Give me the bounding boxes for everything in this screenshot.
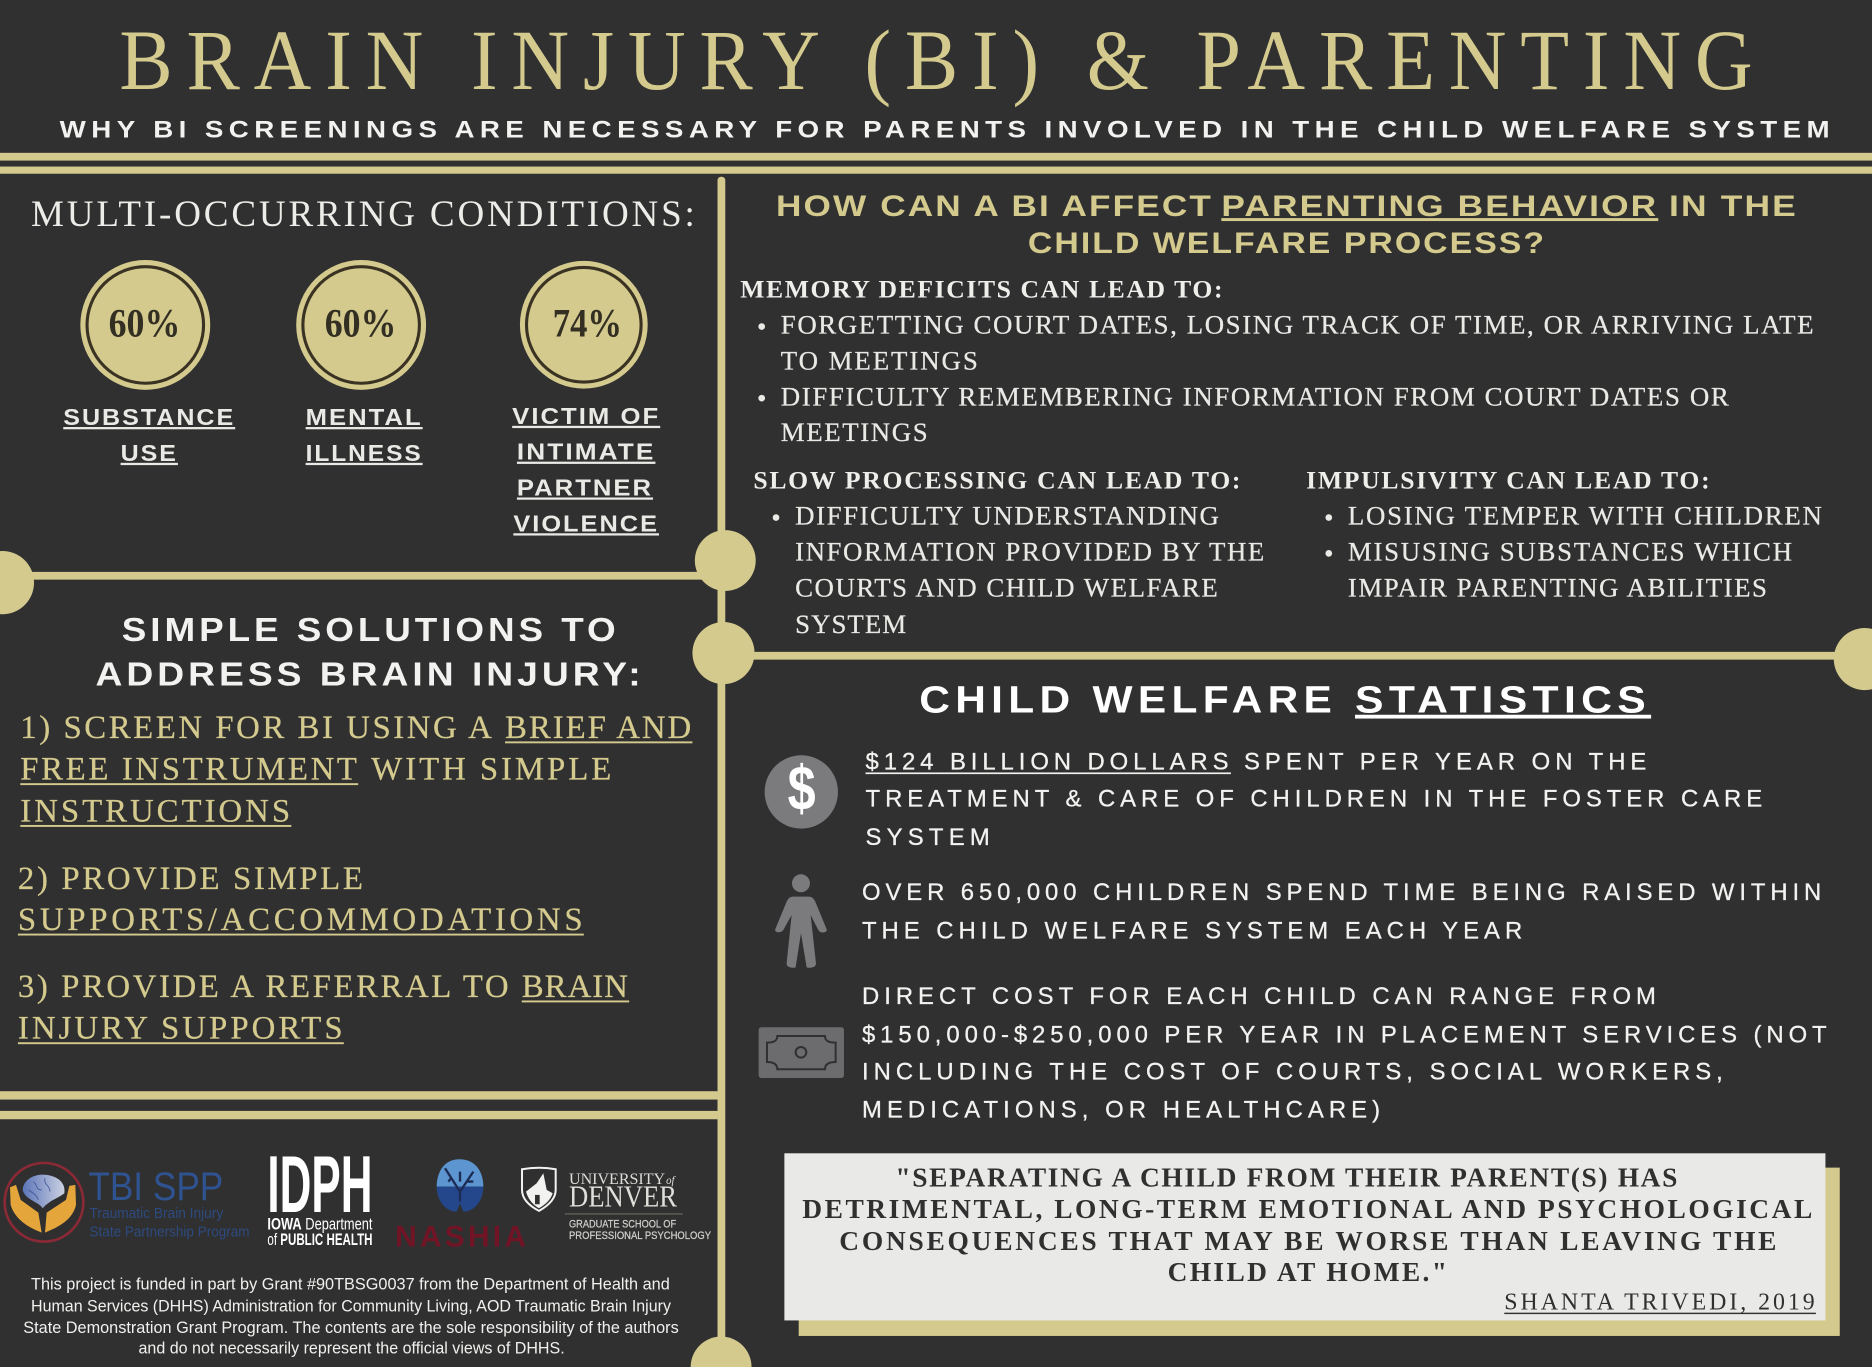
text block: memory deficits: MEMORY DEFICITS CAN LEAD TO:	[740, 274, 1223, 303]
panel: parenting behavior	[740, 190, 1822, 639]
stat: 74% victim of intimate partner violence: 74%	[553, 301, 622, 346]
logo: NASHIA	[395, 1159, 526, 1253]
stat: 74% victim of intimate partner violence: INTIMATE	[517, 439, 655, 465]
stat: direct cost: DIRECT COST FOR EACH CHILD CAN RANGE FROM	[862, 983, 1656, 1010]
panel: multi-occurring conditions	[31, 194, 695, 536]
text block: memory deficits: FORGETTING COURT DATES, LOSING TRACK OF TIME, OR ARRIVING LATE	[781, 310, 1814, 340]
stat: direct cost: MEDICATIONS, OR HEALTHCARE)	[862, 1096, 1380, 1123]
logo: University of Denver: PROFESSIONAL PSYCHOLOGY	[569, 1230, 711, 1242]
stat: 124 billion: $124 BILLION DOLLARS	[866, 748, 1228, 775]
stat: 124 billion: SPENT PER YEAR ON THE	[1244, 748, 1646, 775]
panel: logos	[5, 1140, 711, 1253]
logo: University of Denver: UNIVERSITY	[569, 1171, 665, 1188]
solution 3	[18, 969, 629, 1047]
stat: direct cost: INCLUDING THE COST OF COURTS, SOCIAL WORKERS,	[862, 1058, 1723, 1085]
text block: impulsivity: IMPULSIVITY CAN LEAD TO:	[1306, 465, 1710, 494]
heading: parenting behavior: HOW CAN A BI AFFECT	[776, 190, 1213, 223]
heading: parenting behavior: PARENTING BEHAVIOR	[1221, 190, 1658, 223]
solution 3: 3) PROVIDE A REFERRAL TO	[18, 969, 509, 1005]
callout: quote: DETRIMENTAL, LONG-TERM EMOTIONAL AND PSYCHOLOGICAL	[802, 1194, 1812, 1224]
stat: 60% substance use: 60%	[109, 301, 180, 346]
stat: 650,000 children: THE CHILD WELFARE SYSTEM EACH YEAR	[862, 917, 1522, 944]
stat: 60% mental illness: ILLNESS	[306, 440, 423, 466]
heading: parenting behavior: CHILD WELFARE PROCESS?	[1028, 227, 1546, 260]
heading: simple solutions: ADDRESS BRAIN INJURY:	[96, 656, 645, 693]
logo: NASHIA: NASHIA	[395, 1220, 526, 1253]
stat: 124 billion: TREATMENT & CARE OF CHILDREN IN THE FOSTER CARE	[866, 786, 1762, 813]
logo: IDPH	[267, 1140, 373, 1249]
callout: quote: SHANTA TRIVEDI, 2019	[1504, 1290, 1815, 1316]
stat: 60% mental illness: 60%	[325, 301, 396, 346]
logo: IDPH: of PUBLIC HEALTH	[267, 1230, 372, 1249]
solution 1: INSTRUCTIONS	[20, 793, 290, 829]
heading: simple solutions	[96, 612, 645, 693]
stat: 650,000 children	[862, 879, 1821, 944]
funding note: This project is funded in part by Grant #90TBSG0037 from the Department of Health and	[31, 1274, 670, 1293]
funding note: and do not necessarily represent the official views of DHHS.	[138, 1338, 565, 1357]
callout: quote: CHILD AT HOME."	[1168, 1257, 1447, 1287]
heading: multi-occurring conditions: MULTI-OCCURRING CONDITIONS:	[31, 194, 695, 235]
funding note: Human Services (DHHS) Administration for Community Living, AOD Traumatic Brain Injury	[31, 1296, 672, 1315]
icon: dollar: $	[788, 754, 816, 824]
icon: person	[775, 874, 827, 968]
solution 1	[20, 710, 692, 829]
solution 3: INJURY SUPPORTS	[18, 1011, 343, 1047]
heading: child welfare statistics: STATISTICS	[1355, 679, 1651, 722]
panel: child welfare statistics	[759, 679, 1827, 1123]
logo: IDPH: IOWA Department	[267, 1215, 373, 1234]
stat: 60% mental illness	[296, 260, 426, 466]
subtitle: WHY BI SCREENINGS ARE NECESSARY FOR PARENTS INVOLVED IN THE CHILD WELFARE SYSTEM	[60, 116, 1835, 143]
callout: quote: "SEPARATING A CHILD FROM THEIR PARENT(S) HAS	[895, 1163, 1677, 1193]
logo: TBI SPP: TBI SPP	[88, 1165, 223, 1209]
text block: memory deficits	[740, 274, 1814, 447]
solution 1: WITH SIMPLE	[371, 752, 611, 788]
solution 2: 2) PROVIDE SIMPLE	[18, 861, 363, 897]
logo: TBI SPP: Traumatic Brain Injury	[90, 1205, 224, 1222]
logo: University of Denver	[522, 1168, 711, 1242]
stat: direct cost: $150,000-$250,000 PER YEAR IN PLACEMENT SERVICES (NOT	[862, 1021, 1827, 1048]
text block: impulsivity: LOSING TEMPER WITH CHILDREN	[1348, 501, 1822, 531]
panel: simple solutions	[18, 612, 692, 1047]
logo: University of Denver: of	[666, 1173, 676, 1187]
text block: slow processing: SYSTEM	[795, 609, 906, 639]
solution 3: BRAIN	[522, 969, 628, 1005]
solution 1: 1) SCREEN FOR BI USING A	[20, 710, 492, 746]
text block: slow processing: SLOW PROCESSING CAN LEAD TO:	[753, 465, 1240, 494]
stat: 124 billion	[866, 748, 1762, 851]
heading: parenting behavior	[776, 190, 1798, 260]
heading: child welfare statistics	[919, 679, 1651, 722]
text block: slow processing: COURTS AND CHILD WELFARE	[795, 572, 1218, 602]
stat: direct cost	[862, 983, 1827, 1123]
icon: money bill	[759, 1027, 844, 1078]
funding note	[23, 1274, 679, 1357]
stat: 74% victim of intimate partner violence	[512, 261, 660, 536]
heading: parenting behavior: IN THE	[1669, 190, 1798, 223]
callout: quote: CONSEQUENCES THAT MAY BE WORSE THAN LEAVING THE	[839, 1226, 1776, 1256]
stat: 60% substance use: USE	[121, 440, 178, 466]
solution 2	[18, 861, 584, 938]
logo: TBI SPP: State Partnership Program	[90, 1224, 250, 1241]
text block: memory deficits: DIFFICULTY REMEMBERING INFORMATION FROM COURT DATES OR	[781, 381, 1729, 411]
stat: 60% substance use: SUBSTANCE	[63, 404, 235, 430]
logo: University of Denver: DENVER	[569, 1180, 678, 1214]
funding note: State Demonstration Grant Program. The contents are the sole responsibility of the authors	[23, 1318, 679, 1337]
callout: quote	[784, 1153, 1840, 1336]
logo: TBI SPP	[5, 1163, 250, 1242]
solution 1: BRIEF AND	[505, 710, 691, 746]
text block: memory deficits: MEETINGS	[781, 417, 928, 447]
text block: impulsivity: MISUSING SUBSTANCES WHICH	[1348, 537, 1792, 567]
solution 2: SUPPORTS/ACCOMMODATIONS	[18, 902, 583, 938]
stat: 124 billion: SYSTEM	[866, 824, 990, 851]
stat: 60% substance use	[63, 260, 235, 466]
text block: impulsivity: IMPAIR PARENTING ABILITIES	[1348, 572, 1767, 602]
text block: slow processing	[753, 465, 1264, 639]
stat: 74% victim of intimate partner violence: VIOLENCE	[513, 510, 659, 536]
logo: IDPH: IDPH	[267, 1140, 372, 1230]
text block: impulsivity	[1306, 465, 1822, 602]
heading: child welfare statistics: CHILD WELFARE	[919, 679, 1337, 722]
icon: dollar	[765, 754, 838, 829]
stat: 74% victim of intimate partner violence: PARTNER	[517, 474, 653, 500]
heading: simple solutions: SIMPLE SOLUTIONS TO	[122, 612, 620, 649]
text block: slow processing: INFORMATION PROVIDED BY THE	[795, 537, 1264, 567]
stat: 60% mental illness: MENTAL	[306, 404, 423, 430]
stat: 74% victim of intimate partner violence: VICTIM OF	[512, 403, 660, 429]
stat: 650,000 children: OVER 650,000 CHILDREN SPEND TIME BEING RAISED WITHIN	[862, 879, 1821, 906]
text block: memory deficits: TO MEETINGS	[781, 346, 978, 376]
solution 1: FREE INSTRUMENT	[20, 752, 357, 788]
title: BRAIN INJURY (BI) & PARENTING	[119, 12, 1753, 108]
logo: University of Denver: GRADUATE SCHOOL OF	[569, 1219, 676, 1231]
text block: slow processing: DIFFICULTY UNDERSTANDING	[795, 501, 1219, 531]
